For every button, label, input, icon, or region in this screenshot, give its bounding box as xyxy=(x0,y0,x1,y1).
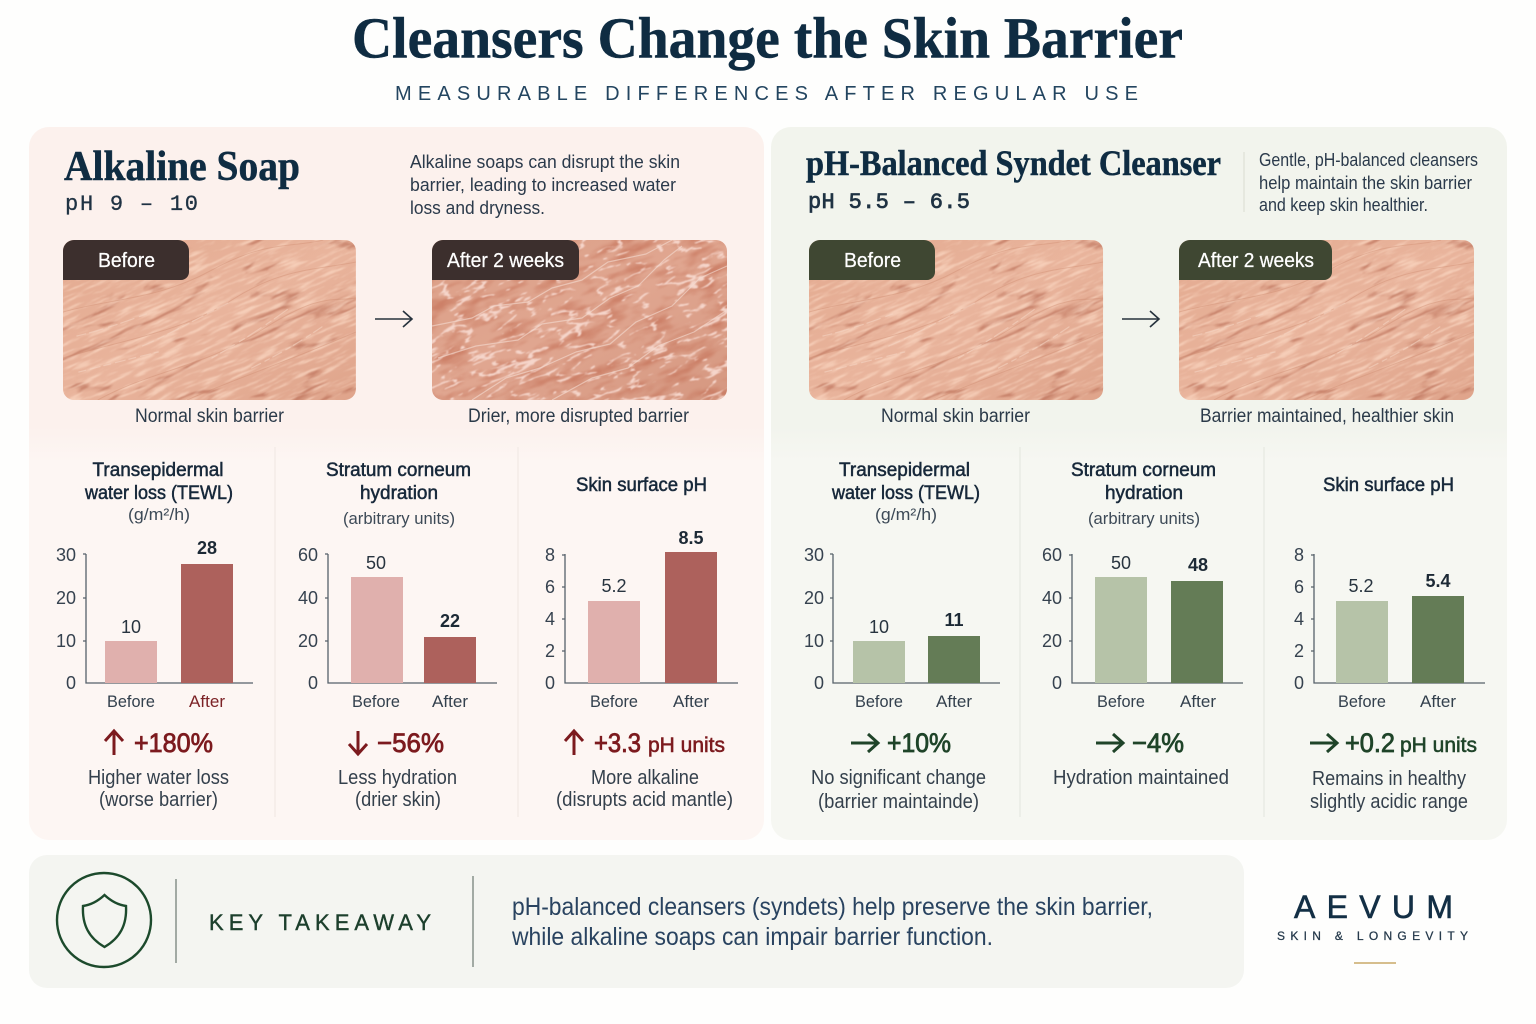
metric: surface pH, syndet xyxy=(1294,475,1485,813)
photo: skin after, syndet xyxy=(1037,43,1536,595)
subtitle: MEASURABLE DIFFERENCES AFTER REGULAR USE xyxy=(395,83,1138,105)
metric note: More alkaline xyxy=(591,767,699,789)
bar chart xyxy=(1042,545,1243,711)
bar chart: 0 xyxy=(66,673,76,693)
metric heading: (arbitrary units) xyxy=(343,509,455,528)
badge: after 2 weeks: After 2 weeks xyxy=(1198,250,1314,272)
metric: surface pH, alkaline xyxy=(545,475,738,811)
takeaway text xyxy=(511,893,1153,951)
bar chart: Before xyxy=(590,692,638,711)
metric: hydration, syndet xyxy=(1042,460,1243,789)
bar chart xyxy=(1294,545,1485,711)
bar chart: 4 xyxy=(545,609,555,629)
change: +3.3 pH units xyxy=(565,728,725,758)
metric note xyxy=(811,767,986,813)
metric heading: (g/m²/h) xyxy=(875,505,937,524)
bar chart: 5.2 xyxy=(601,576,627,596)
bar chart: 30 xyxy=(56,545,76,565)
bar chart xyxy=(804,545,1000,711)
bar chart: 40 xyxy=(1042,588,1062,608)
badge: before: Before xyxy=(98,250,155,272)
bar chart: Before xyxy=(855,692,903,711)
metric heading xyxy=(1071,460,1216,528)
logo: Aevum: SKIN & LONGEVITY xyxy=(1277,929,1468,943)
change: +10%: +10% xyxy=(887,728,951,758)
bar chart: 20 xyxy=(298,631,318,651)
bar chart: 40 xyxy=(298,588,318,608)
metric heading xyxy=(831,460,980,524)
metric heading: Skin surface pH xyxy=(1323,475,1454,496)
arrow: syndet before to after xyxy=(1122,311,1159,327)
bar chart: 10 xyxy=(121,617,141,637)
bar chart: 10 xyxy=(804,631,824,651)
bar chart xyxy=(56,538,253,711)
metric heading: (arbitrary units) xyxy=(1088,509,1200,528)
logo: Aevum: AEVUM xyxy=(1294,889,1453,925)
change: +10% xyxy=(851,728,951,758)
bar chart: 8 xyxy=(1294,545,1304,565)
bar chart: 8 xyxy=(545,545,555,565)
bar chart: 10 xyxy=(869,617,889,637)
badge: before xyxy=(809,240,935,280)
bar chart: 20 xyxy=(56,588,76,608)
metric note xyxy=(1310,768,1468,813)
bar chart xyxy=(545,528,738,711)
metric note: Hydration maintained xyxy=(1053,767,1229,789)
metric: TEWL, syndet xyxy=(804,460,1000,813)
takeaway text: pH-balanced cleansers (syndets) help preserve the skin barrier, xyxy=(512,893,1153,921)
takeaway text: while alkaline soaps can impair barrier function. xyxy=(511,923,993,951)
metric heading: Skin surface pH xyxy=(576,475,707,496)
panel: alkaline soap xyxy=(0,43,870,840)
bar chart: 60 xyxy=(298,545,318,565)
description: alkaline soap: loss and dryness. xyxy=(410,197,545,218)
description: alkaline soap: Alkaline soaps can disrupt the skin xyxy=(410,151,680,172)
metric note xyxy=(338,767,457,811)
caption: normal skin barrier: Normal skin barrier xyxy=(135,406,285,427)
bar chart: 0 xyxy=(308,673,318,693)
photo: skin before, alkaline xyxy=(0,43,501,595)
photo: skin after, alkaline xyxy=(294,47,870,590)
bar chart: 20 xyxy=(804,588,824,608)
description: syndet: help maintain the skin barrier xyxy=(1259,172,1472,193)
heading: syndet cleanser: pH-Balanced Syndet Cleanser xyxy=(806,143,1221,183)
metric note: No significant change xyxy=(811,767,986,789)
metric heading: water loss (TEWL) xyxy=(84,483,233,504)
metric heading: hydration xyxy=(1105,483,1183,504)
bar chart: After xyxy=(189,692,225,711)
metric heading: (g/m²/h) xyxy=(128,505,190,524)
bar chart: 60 xyxy=(1042,545,1062,565)
metric note: Less hydration xyxy=(338,767,457,789)
metric heading: Transepidermal xyxy=(839,460,970,481)
metric note: (drier skin) xyxy=(355,789,441,811)
metric heading: hydration xyxy=(360,483,438,504)
bar chart: 22 xyxy=(440,611,460,631)
bar chart: 28 xyxy=(197,538,217,558)
bar chart: After xyxy=(673,692,709,711)
bar chart: After xyxy=(1420,692,1456,711)
metric note xyxy=(556,767,733,811)
change: -4% xyxy=(1096,728,1184,758)
badge: after 2 weeks xyxy=(432,240,579,280)
bar chart: 0 xyxy=(545,673,555,693)
bar chart: 0 xyxy=(814,673,824,693)
metric note: (worse barrier) xyxy=(99,789,218,811)
metric note: Remains in healthy xyxy=(1312,768,1466,790)
metric heading xyxy=(326,460,471,528)
bar chart: 6 xyxy=(545,577,555,597)
metric heading xyxy=(84,460,233,524)
metric note xyxy=(88,767,229,811)
bar chart: 5.4 xyxy=(1425,571,1451,591)
caption: drier barrier: Drier, more disrupted barrier xyxy=(468,406,690,427)
pH range: syndet: pH 5.5 – 6.5 xyxy=(808,190,970,215)
bar chart: 2 xyxy=(1294,641,1304,661)
bar chart: 20 xyxy=(1042,631,1062,651)
heading: alkaline soap: Alkaline Soap xyxy=(64,144,300,190)
bar chart: 10 xyxy=(56,631,76,651)
badge: after 2 weeks: After 2 weeks xyxy=(447,250,564,272)
change: -56%: −56% xyxy=(377,728,444,758)
bar chart: After xyxy=(1180,692,1216,711)
bar chart: 5.2 xyxy=(1348,576,1374,596)
bar chart: Before xyxy=(352,692,400,711)
change: +3.3 pH units: +3.3 xyxy=(594,728,641,758)
bar chart: 4 xyxy=(1294,609,1304,629)
change: +180% xyxy=(105,728,213,758)
change: +3.3 pH units: pH units xyxy=(648,734,725,757)
arrow: alkaline before to after xyxy=(375,311,412,327)
description: syndet xyxy=(1259,149,1478,215)
description: alkaline soap: barrier, leading to increased water xyxy=(410,174,676,195)
badge: before xyxy=(63,240,189,280)
bar chart: 0 xyxy=(1294,673,1304,693)
bar chart xyxy=(298,545,497,711)
caption: normal skin barrier: Normal skin barrier xyxy=(881,406,1031,427)
icon: shield in circle xyxy=(57,873,151,967)
metric: hydration, alkaline xyxy=(298,460,497,811)
caption: barrier maintained: Barrier maintained, healthier skin xyxy=(1200,406,1454,427)
change: +0.2 pH units: +0.2 xyxy=(1345,728,1395,758)
description: syndet: Gentle, pH-balanced cleansers xyxy=(1259,149,1478,170)
bar chart: Before xyxy=(1097,692,1145,711)
bar chart: 50 xyxy=(366,553,386,573)
metric heading: water loss (TEWL) xyxy=(831,483,980,504)
metric heading: Transepidermal xyxy=(92,460,224,481)
bar chart: 8.5 xyxy=(678,528,704,548)
logo: Aevum xyxy=(1277,889,1468,963)
bar chart: Before xyxy=(107,692,155,711)
bar chart: 6 xyxy=(1294,577,1304,597)
bar chart: After xyxy=(432,692,468,711)
panel: syndet cleanser xyxy=(668,43,1536,840)
badge: after 2 weeks xyxy=(1179,240,1332,280)
metric note: slightly acidic range xyxy=(1310,791,1468,813)
change: -4%: −4% xyxy=(1132,728,1184,758)
bar chart: 30 xyxy=(804,545,824,565)
bar chart: After xyxy=(936,692,972,711)
pH range: alkaline soap: pH 9 – 10 xyxy=(65,192,198,217)
bar chart: 48 xyxy=(1188,555,1208,575)
metric heading: Stratum corneum xyxy=(326,460,471,481)
metric note: (barrier maintainde) xyxy=(818,791,979,813)
change: +0.2 pH units xyxy=(1310,728,1477,758)
change: +180%: +180% xyxy=(134,728,213,758)
title: Cleansers Change the Skin Barrier xyxy=(352,6,1183,70)
bar chart: 0 xyxy=(1052,673,1062,693)
key takeaway label: KEY TAKEAWAY xyxy=(209,910,431,935)
change: -56% xyxy=(349,728,444,758)
change: +0.2 pH units: pH units xyxy=(1400,734,1477,757)
metric heading: Stratum corneum xyxy=(1071,460,1216,481)
description: syndet: and keep skin healthier. xyxy=(1259,194,1428,215)
bar chart: 2 xyxy=(545,641,555,661)
metric note: (disrupts acid mantle) xyxy=(556,789,733,811)
description: alkaline soap xyxy=(410,151,680,218)
bar chart: 50 xyxy=(1111,553,1131,573)
panel: key takeaway xyxy=(29,855,1244,988)
photo: skin before, syndet xyxy=(668,43,1249,595)
badge: before: Before xyxy=(844,250,901,272)
metric note: Higher water loss xyxy=(88,767,229,789)
bar chart: 11 xyxy=(944,610,964,630)
metric: TEWL, alkaline xyxy=(56,460,253,811)
bar chart: Before xyxy=(1338,692,1386,711)
